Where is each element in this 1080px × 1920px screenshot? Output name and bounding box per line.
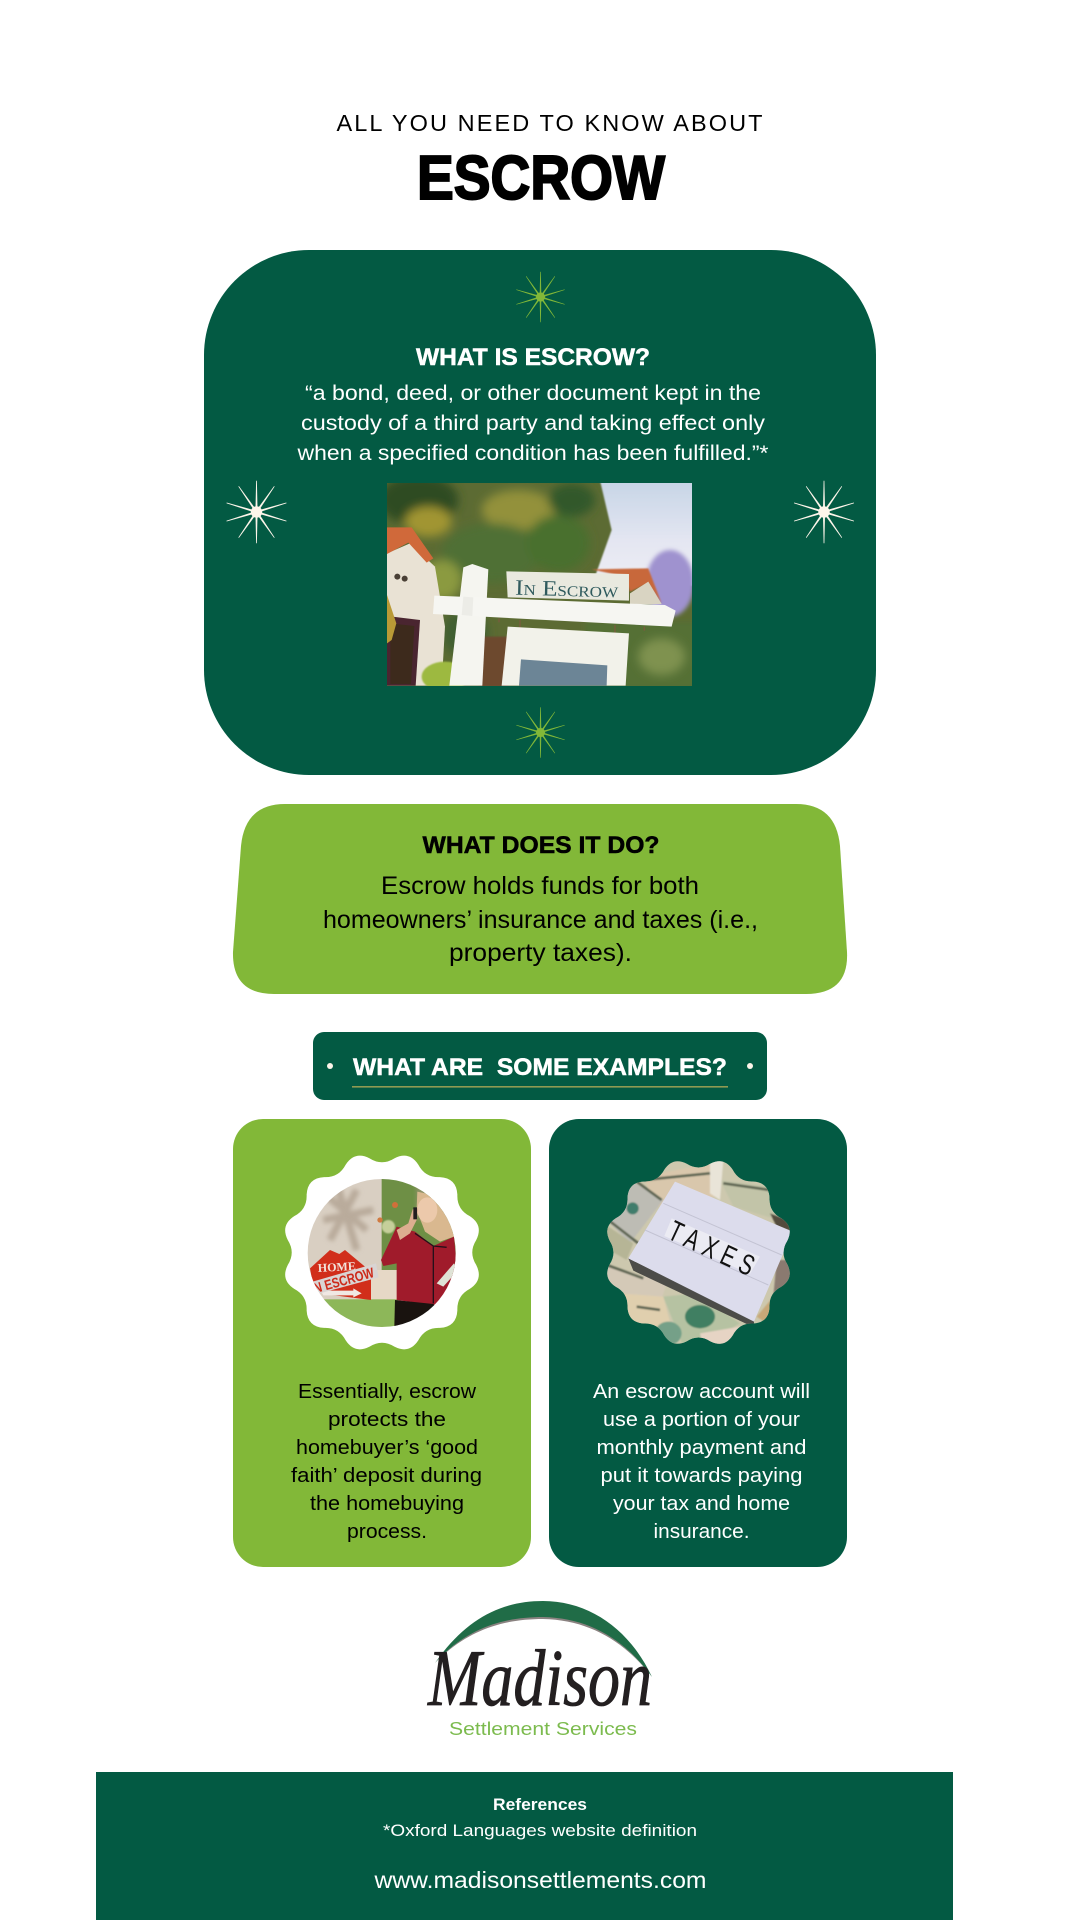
icon: white star right <box>794 481 854 543</box>
house roof <box>387 527 433 563</box>
body text <box>323 872 758 967</box>
grass <box>324 1299 398 1327</box>
lawn backdrop <box>371 1270 400 1300</box>
face <box>417 1197 437 1223</box>
lightbox face <box>628 1182 793 1322</box>
purple tree <box>646 550 694 617</box>
card text <box>291 1380 482 1543</box>
card text: monthly payment and <box>596 1436 806 1459</box>
card: good faith deposit <box>233 1119 531 1567</box>
card text: protects the <box>328 1408 446 1431</box>
vents <box>394 574 400 580</box>
bullet left <box>327 1063 333 1069</box>
panel: what is escrow <box>204 250 876 775</box>
card background <box>233 1119 531 1567</box>
red house sign <box>310 1250 371 1300</box>
logo: Madison Settlement Services <box>427 1601 652 1739</box>
logo arc <box>435 1601 652 1677</box>
card text: homebuyer’s ‘good <box>296 1436 478 1459</box>
sign lettering: N ESCROW <box>312 1264 376 1296</box>
body text: Escrow holds funds for both <box>381 872 699 900</box>
papers <box>436 1264 455 1287</box>
footer <box>96 1772 953 1920</box>
logo tagline: Settlement Services <box>449 1718 637 1739</box>
card: escrow account <box>549 1119 847 1567</box>
banner heading: WHAT ARE SOME EXAMPLES? <box>353 1054 727 1081</box>
reference citation: *Oxford Languages website definition <box>383 1822 697 1840</box>
sign banner <box>313 1263 379 1294</box>
card text: the homebuying <box>310 1492 464 1515</box>
taxes lettering: TAXES <box>663 1215 759 1283</box>
card text: faith’ deposit during <box>291 1464 482 1487</box>
banner: what are some examples <box>313 1032 767 1100</box>
hanging hooks <box>498 618 645 633</box>
heading: what is escrow: WHAT IS ESCROW? <box>416 344 650 371</box>
title: ESCROW <box>417 144 665 213</box>
logo wordmark: Madison <box>427 1635 652 1723</box>
crossbar <box>433 596 676 627</box>
right bush <box>585 622 698 688</box>
photo: agent with escrow sign <box>308 1179 456 1327</box>
letter tiles <box>664 1218 760 1274</box>
sky <box>595 483 692 586</box>
card text: Essentially, escrow <box>298 1380 476 1403</box>
wall <box>308 1179 382 1327</box>
photo: in escrow sign <box>387 483 692 686</box>
lightbox side <box>628 1258 754 1327</box>
panel background <box>233 804 847 994</box>
definition quote: “a bond, deed, or other document kept in the <box>305 381 761 405</box>
banner background <box>313 1032 767 1100</box>
subtitle: ALL YOU NEED TO KNOW ABOUT <box>336 110 762 136</box>
sign lettering <box>314 1262 373 1292</box>
logo arc shadow <box>435 1616 652 1677</box>
phone hand <box>397 1208 418 1240</box>
rider lettering: In Escrow <box>515 575 619 602</box>
jacket <box>381 1227 457 1305</box>
definition quote <box>296 381 769 465</box>
panel: what does it do <box>233 804 847 994</box>
card text: An escrow account will <box>593 1380 810 1403</box>
card text <box>593 1380 810 1543</box>
white scalloped badge <box>285 1156 479 1349</box>
footer background <box>96 1772 953 1920</box>
definition quote: custody of a third party and taking effect only <box>301 411 765 435</box>
heading: what does it do: WHAT DOES IT DO? <box>422 832 660 859</box>
website: www.madisonsettlements.com <box>373 1867 706 1893</box>
icon: white star left <box>227 481 286 543</box>
bullet right <box>747 1063 753 1069</box>
post <box>449 564 488 686</box>
small bush <box>420 660 464 686</box>
definition quote: when a specified condition has been fulfilled.”* <box>296 441 769 465</box>
hair <box>417 1192 454 1242</box>
body text: property taxes). <box>449 939 632 967</box>
hanging sign <box>502 627 629 686</box>
icon: green star bottom <box>517 708 564 758</box>
references heading: References <box>493 1796 587 1814</box>
top rider <box>506 571 629 601</box>
card text: insurance. <box>654 1520 750 1543</box>
sign arrow <box>321 1288 362 1297</box>
card text: process. <box>347 1520 427 1543</box>
distant roof <box>592 568 662 603</box>
card text: put it towards paying <box>600 1464 802 1487</box>
icon: green star top <box>517 272 564 322</box>
body text: homeowners’ insurance and taxes (i.e., <box>323 906 758 934</box>
pants <box>394 1300 434 1326</box>
card text: your tax and home <box>613 1492 790 1515</box>
card text: use a portion of your <box>603 1408 800 1431</box>
trees <box>378 475 595 657</box>
sign lettering: HOME <box>317 1259 356 1275</box>
house wall <box>387 543 445 686</box>
photo: taxes lightbox on money <box>607 1161 790 1344</box>
banknotes <box>603 1160 793 1347</box>
card background <box>549 1119 847 1567</box>
panel background <box>204 250 876 775</box>
garden <box>382 1179 456 1276</box>
window <box>387 616 420 686</box>
